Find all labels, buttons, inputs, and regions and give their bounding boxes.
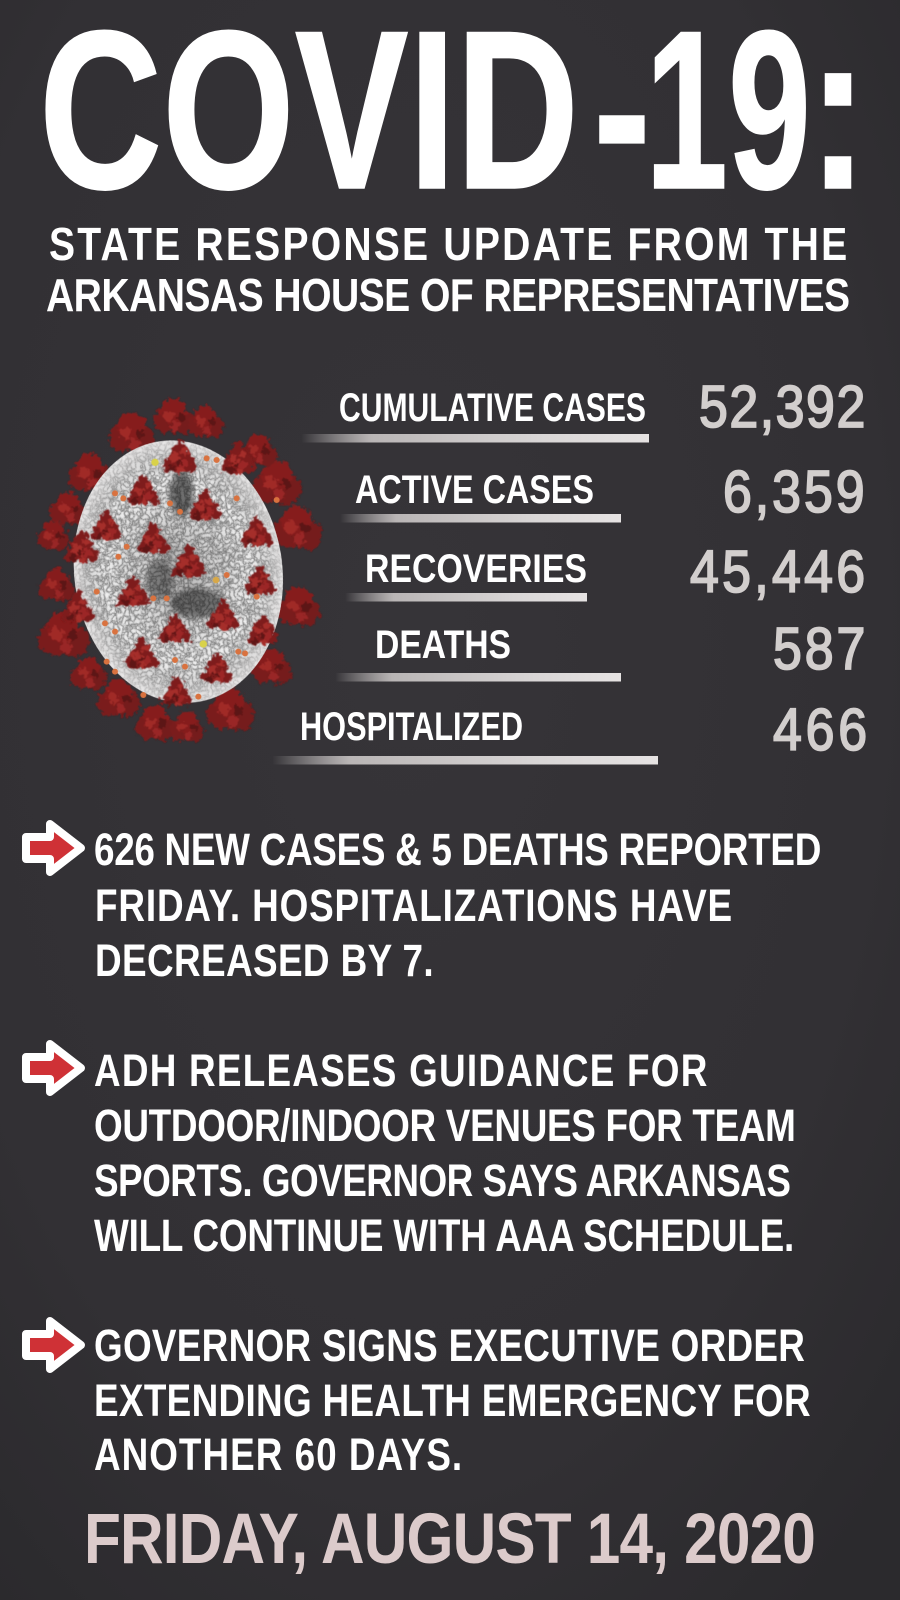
stat: recoveries: 45,446 xyxy=(690,539,865,605)
subtitle: ARKANSAS HOUSE OF REPRESENTATIVES xyxy=(46,270,850,322)
bullet text 3: EXTENDING HEALTH EMERGENCY FOR xyxy=(94,1376,811,1426)
bullet text 2: WILL CONTINUE WITH AAA SCHEDULE. xyxy=(94,1211,794,1261)
date footer: FRIDAY, AUGUST 14, 2020 xyxy=(84,1498,816,1578)
icon: red arrow 2 xyxy=(26,1044,81,1092)
stat: active cases xyxy=(340,459,865,525)
bullet text 2: OUTDOOR/INDOOR VENUES FOR TEAM xyxy=(94,1101,796,1151)
stat: recoveries: RECOVERIES xyxy=(365,547,587,591)
bullet text 3 xyxy=(94,1321,811,1480)
bullet text 1: FRIDAY. HOSPITALIZATIONS HAVE xyxy=(95,881,732,931)
stat: cumulative cases xyxy=(301,374,865,442)
subtitle: STATE RESPONSE UPDATE FROM THE xyxy=(49,219,847,271)
stat: deaths: 587 xyxy=(773,616,865,682)
stat: hospitalized: HOSPITALIZED xyxy=(300,705,523,749)
stat: deaths xyxy=(335,616,865,682)
stat: cumulative cases: CUMULATIVE CASES xyxy=(339,386,646,430)
icon: coronavirus illustration xyxy=(37,399,322,742)
bullet text 2 xyxy=(94,1046,796,1261)
stat: cumulative cases: 52,392 xyxy=(699,374,865,440)
subtitle xyxy=(46,219,850,322)
stat: active cases: ACTIVE CASES xyxy=(355,468,594,512)
bullet text 1: 626 NEW CASES & 5 DEATHS REPORTED xyxy=(94,825,821,875)
bullet text 1: DECREASED BY 7. xyxy=(95,936,434,986)
stat: recoveries xyxy=(345,539,865,605)
stat: active cases: 6,359 xyxy=(723,459,865,525)
stat: deaths: DEATHS xyxy=(375,623,511,667)
icon: red arrow 1 xyxy=(26,824,81,872)
bullet text 1 xyxy=(94,825,821,986)
bullet text 2: SPORTS. GOVERNOR SAYS ARKANSAS xyxy=(94,1156,791,1206)
bullet text 3: ANOTHER 60 DAYS. xyxy=(94,1430,462,1480)
bullet text 3: GOVERNOR SIGNS EXECUTIVE ORDER xyxy=(94,1321,805,1371)
bullet text 2: ADH RELEASES GUIDANCE FOR xyxy=(94,1046,707,1096)
icon: red arrow 3 xyxy=(26,1321,81,1369)
stat: hospitalized xyxy=(272,697,867,764)
stat: hospitalized: 466 xyxy=(773,697,867,763)
